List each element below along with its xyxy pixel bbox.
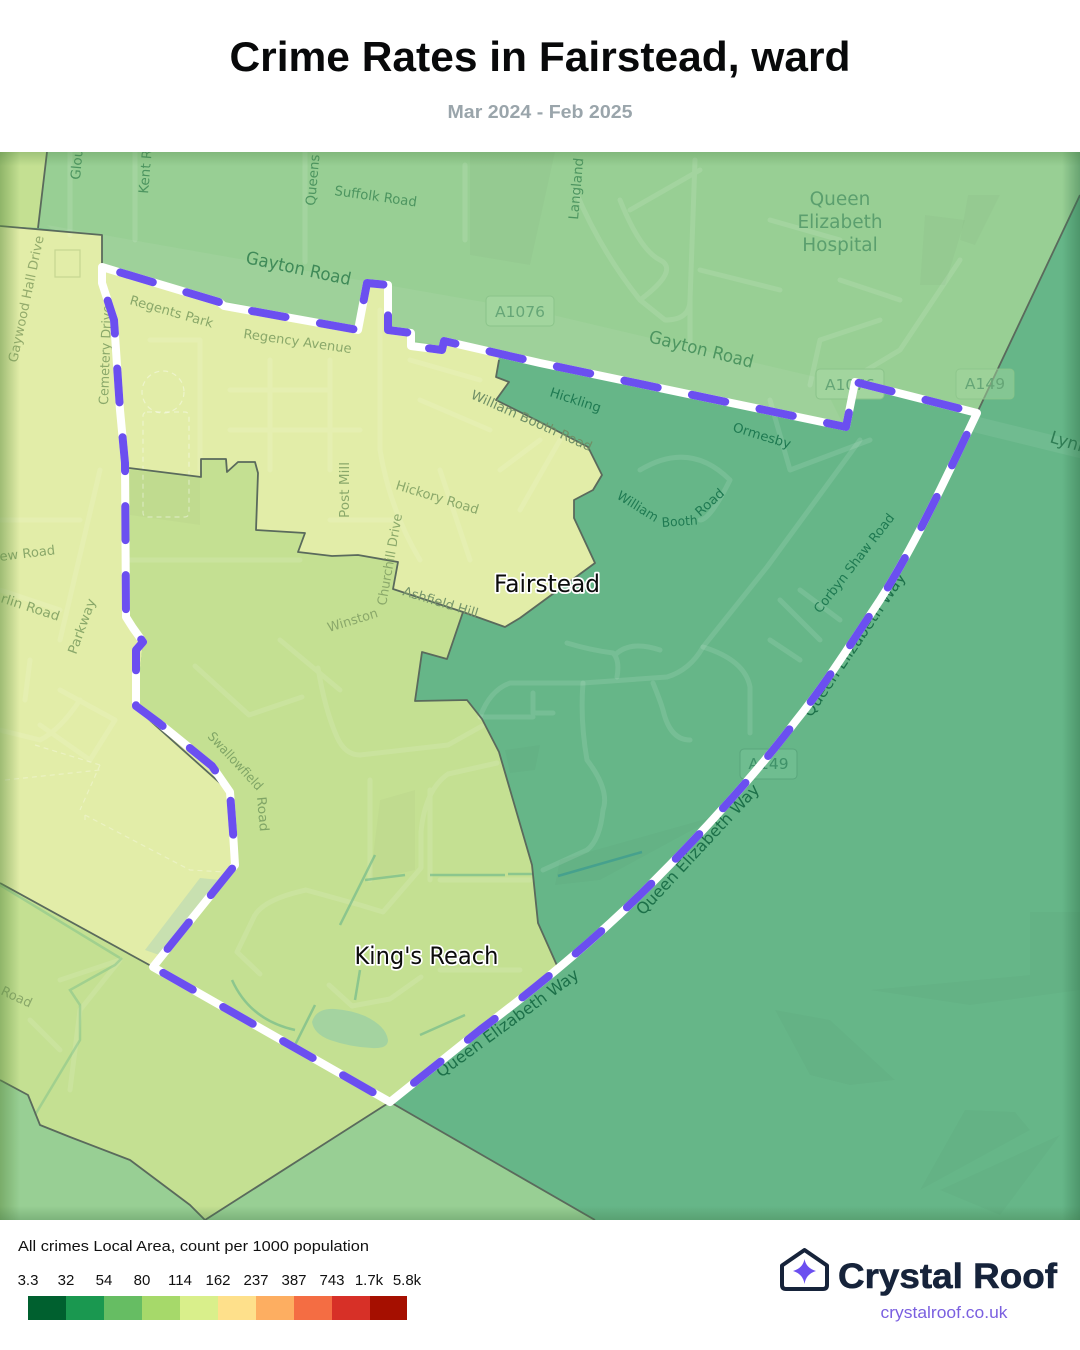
label: northern streets	[68, 148, 587, 220]
legend scale labels: 5.8k	[393, 1272, 422, 1289]
feature: cemetery outlines	[55, 250, 189, 517]
label: northern streets: Suffolk Road	[333, 183, 418, 211]
road shield: A149 south: A149	[748, 755, 789, 773]
road network	[0, 152, 1080, 1090]
water: streams	[0, 852, 642, 1115]
area: west pale yellow	[0, 226, 235, 967]
label: Fairstead streets: Parkway	[66, 596, 100, 656]
label: northern streets: Langland	[566, 157, 587, 220]
edge vignette	[0, 152, 1080, 1220]
place label: Fairstead: Fairstead	[494, 570, 600, 598]
place label: King's Reach: King's Reach	[354, 942, 498, 970]
label: Fairstead streets: ew Road	[0, 543, 56, 565]
label: Queen Elizabeth Way: Queen Elizabeth Way	[432, 965, 583, 1081]
legend colour bar	[28, 1296, 407, 1320]
area: far south-west darker green	[0, 1080, 205, 1220]
map base: east dark green area	[0, 152, 1080, 1220]
legend scale labels: 3.3	[18, 1272, 38, 1289]
ward and neighbourhood boundary lines	[0, 152, 1080, 1220]
label: east estate streets: Corbyn Shaw Road	[811, 511, 898, 616]
label: Queen Elizabeth Way: Queen Elizabeth Way	[632, 780, 763, 919]
area: King's Reach	[126, 459, 559, 1102]
dashed footpaths on west open space	[5, 745, 225, 872]
label: Gayton Road east: Gayton Road	[647, 327, 755, 373]
legend scale labels: 1.7k	[355, 1272, 384, 1289]
label: northern streets: Kent R	[136, 149, 156, 194]
label: Fairstead streets: Winston	[326, 606, 380, 636]
area: Fairstead north	[102, 267, 602, 627]
label: east estate streets: Booth	[661, 514, 698, 531]
area: south centre green	[205, 1102, 595, 1220]
legend scale labels: 54	[96, 1272, 112, 1289]
label: east estate streets: Ormesby	[731, 420, 793, 452]
legend	[18, 1238, 422, 1320]
legend scale labels	[18, 1272, 422, 1289]
legend scale labels: 32	[58, 1272, 74, 1289]
area: north light green	[38, 152, 1080, 427]
label: Queen Elizabeth Hospital: Queen	[810, 189, 870, 210]
map panel	[0, 148, 1080, 1220]
legend scale labels: 114	[168, 1272, 192, 1289]
title: Crime Rates in Fairstead, ward	[230, 33, 850, 80]
label: northern streets: Queens	[303, 154, 323, 206]
label: Fairstead streets	[0, 235, 594, 1011]
road shield: A149 north	[956, 369, 1014, 399]
legend title: All crimes Local Area, count per 1000 population	[18, 1238, 369, 1255]
road shield: A1076 west: A1076	[495, 303, 545, 321]
label: Queen Elizabeth Way	[432, 569, 909, 1081]
label: east estate streets	[548, 386, 898, 616]
road shield: A149 south	[740, 749, 797, 779]
label: east estate streets: William	[614, 489, 661, 526]
legend scale labels: 743	[319, 1272, 345, 1289]
label: Fairstead streets: Ashfield Hill	[401, 584, 480, 622]
road shield: A1076 west	[486, 296, 554, 326]
logo: Crystal Roof	[782, 1250, 1057, 1322]
logo url: crystalroof.co.uk	[880, 1304, 1008, 1322]
logo wordmark: Crystal Roof	[838, 1257, 1057, 1296]
label: Fairstead streets: Regency Avenue	[242, 327, 352, 357]
road shield: A149 north: A149	[965, 375, 1005, 393]
label: Queen Elizabeth Hospital: Hospital	[802, 235, 878, 256]
area: north-west corner	[0, 152, 47, 228]
legend scale labels: 237	[243, 1272, 269, 1289]
label: Fairstead streets: Churchill Drive	[375, 513, 406, 607]
water: lake	[312, 1009, 388, 1048]
legend scale labels: 387	[281, 1272, 307, 1289]
road shield: A1076 east: A1076	[825, 376, 875, 394]
road shield: A1076 east	[816, 369, 884, 399]
label: Queen Elizabeth Hospital: Elizabeth	[797, 212, 883, 233]
road band: Gayton Road	[47, 225, 846, 430]
legend scale labels: 80	[134, 1272, 150, 1289]
label: east estate streets: Hickling	[548, 386, 603, 416]
label: Fairstead streets: Cemetery Drive	[97, 305, 115, 405]
label: Fairstead streets: Hickory Road	[394, 478, 480, 518]
area: south-west green	[0, 883, 390, 1220]
label: Fairstead streets: Post Mill	[338, 462, 353, 518]
label: northern streets: Glou	[68, 148, 87, 180]
subtitle: date range: Mar 2024 - Feb 2025	[448, 102, 632, 122]
label: Fairstead streets: Regents Park	[128, 293, 215, 332]
label: Fairstead streets: Road	[253, 796, 271, 832]
legend scale labels: 162	[205, 1272, 231, 1289]
label: Gayton Road west: Gayton Road	[244, 248, 353, 290]
ward boundary: dashed white and purple outline	[102, 267, 977, 1102]
icon: house with star	[782, 1250, 827, 1289]
label: Queen Elizabeth Hospital	[797, 189, 883, 256]
feature: pale wedge by railway	[145, 878, 220, 957]
label: east estate streets: Road	[693, 486, 728, 520]
label: Fairstead streets: rlin Road	[0, 592, 61, 625]
street labels	[0, 148, 1080, 1081]
label: Queen Elizabeth Way: Queen Elizabeth Way	[799, 569, 909, 720]
subtle land-use patches	[962, 220, 964, 226]
label: Fairstead streets: William Booth Road	[468, 388, 594, 455]
label: Fairstead streets: Gaywood Hall Drive	[6, 235, 48, 364]
label: Fairstead streets: Swallowfield	[204, 729, 266, 794]
